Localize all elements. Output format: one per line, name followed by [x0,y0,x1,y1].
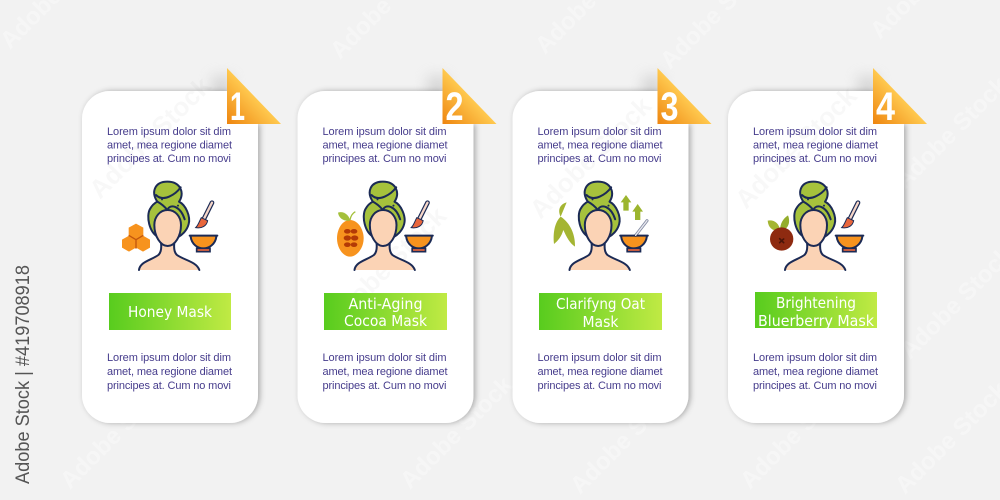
text block: top: amet, mea regione diamet [753,140,878,152]
fold shadow [642,76,662,98]
icon: woman with cocoa mask [337,182,433,270]
stock id vertical label: Adobe Stock | #419708918 [13,265,34,484]
fold shadow [858,76,878,98]
text block: bottom: principes at. Cum no movi [538,380,662,392]
icon: woman with oat mask [554,182,648,270]
number fold 4: 4 [876,85,896,129]
card watermark [83,70,217,204]
text block: top [753,126,878,165]
text block: bottom: principes at. Cum no movi [107,380,231,392]
label: oat mask: Mask [582,313,619,331]
text block: top: principes at. Cum no movi [753,153,877,165]
number fold 3: 3 [660,85,678,129]
label: honey mask [109,293,231,330]
label: honey mask: Honey Mask [128,303,212,321]
text block: bottom [107,352,232,392]
label: blueberry mask: Brightening [776,294,856,312]
text block: top [107,126,232,165]
panel: card 1 honey mask [82,68,281,423]
text block: bottom: Lorem ipsum dolor sit dim [107,352,231,364]
panel: card 2 cocoa mask [298,68,496,423]
text block: top: Lorem ipsum dolor sit dim [753,126,877,138]
text block: top [538,126,662,165]
text block: top: Lorem ipsum dolor sit dim [538,126,662,138]
text block: bottom: principes at. Cum no movi [753,380,877,392]
text block: bottom [322,352,448,392]
icon: woman with blueberry mask [768,182,863,270]
number fold 2 [442,68,496,129]
text block: top: amet, mea regione diamet [538,140,662,152]
text block: bottom: amet, mea regione diamet [322,366,448,378]
label: cocoa mask: Cocoa Mask [344,312,427,330]
number fold 1: 1 [230,85,245,129]
text block: top: principes at. Cum no movi [322,153,446,165]
fold shadow [428,76,448,98]
number fold 2: 2 [446,85,464,129]
text block: top: amet, mea regione diamet [107,140,232,152]
label: cocoa mask [324,293,447,330]
fold shadow [212,76,232,98]
text block: top: principes at. Cum no movi [107,153,231,165]
text block: bottom: amet, mea regione diamet [107,366,232,378]
text block: top: amet, mea regione diamet [322,140,448,152]
text block: top: principes at. Cum no movi [538,153,662,165]
text block: top: Lorem ipsum dolor sit dim [107,126,231,138]
label: blueberry mask: Bluerberry Mask [758,312,874,330]
text block: bottom: amet, mea regione diamet [753,366,878,378]
panel: card 3 oat mask [512,68,712,423]
icon: woman with honey mask [122,182,217,270]
label: blueberry mask [755,292,877,330]
card watermark [319,200,452,334]
text block: bottom: amet, mea regione diamet [538,366,662,378]
text block: bottom: principes at. Cum no movi [322,380,446,392]
label: oat mask [539,293,662,331]
label: cocoa mask: Anti-Aging [348,295,422,313]
number fold 1 [227,68,281,129]
text block: bottom: Lorem ipsum dolor sit dim [538,352,662,364]
number fold 3 [658,68,712,129]
label: oat mask: Clarifyng Oat [556,295,645,313]
text block: bottom [538,352,662,392]
text block: top [322,126,448,165]
number fold 4 [873,68,927,129]
card watermark [524,90,657,224]
text block: bottom: Lorem ipsum dolor sit dim [322,352,446,364]
panel: card 4 blueberry mask [728,68,927,423]
text block: bottom: Lorem ipsum dolor sit dim [753,352,877,364]
card watermark [729,80,863,214]
text block: bottom [753,352,878,392]
text block: top: Lorem ipsum dolor sit dim [322,126,446,138]
